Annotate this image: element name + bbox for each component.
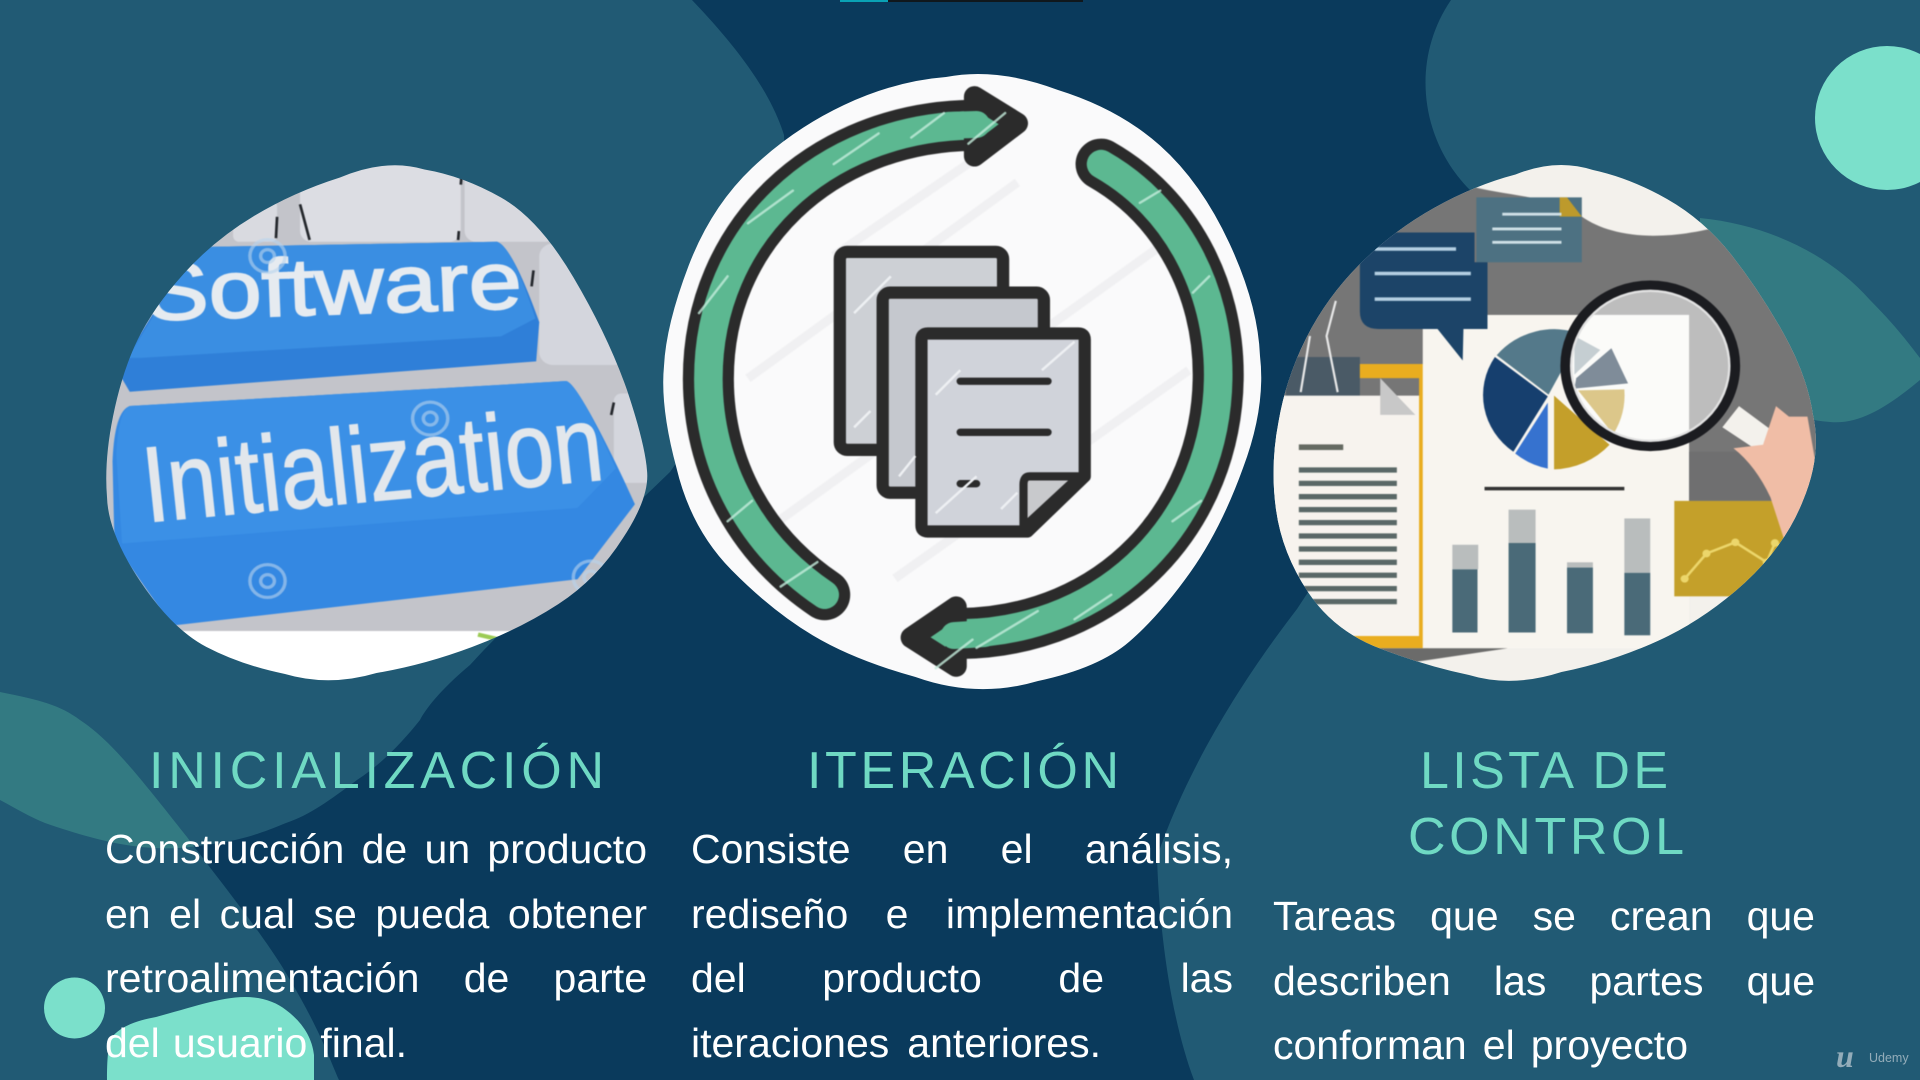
text block: inicialización description: Construcción de un producto [105, 826, 647, 872]
watermark: Udemy: u [1836, 1038, 1854, 1074]
mint circle: top right [1815, 46, 1920, 190]
mint blob: bottom left [107, 997, 314, 1080]
magnifying glass [1563, 285, 1735, 452]
text block: inicialización description: en el cual se pueda obtener [105, 890, 647, 936]
clipboard with text lines [1260, 301, 1428, 648]
hand holding magnifier [1722, 406, 1822, 543]
blue key: Initialization [113, 381, 635, 626]
heading: LISTA DE CONTROL [1408, 742, 1684, 866]
green arrow: bottom right arc [911, 164, 1218, 668]
image: software initialization keyboard [106, 165, 648, 680]
background blob: lower left overlap with top left blob [0, 692, 194, 848]
watermark spirals [250, 240, 609, 597]
blue key: Initialization: Initialization [137, 382, 608, 545]
bar chart [1452, 510, 1650, 635]
background blob: top left [0, 0, 790, 848]
top progress bar [840, 0, 1083, 2]
keyboard keys [233, 161, 660, 483]
text block: iteración description: del producto de las [691, 955, 1233, 1001]
text block: iteración description [691, 826, 1233, 1066]
text block: lista de control description: conforman el proyecto [1273, 1022, 1688, 1068]
background blob: lower left [0, 692, 339, 1080]
image: iteration cycle icon [663, 74, 1262, 690]
heading: LISTA DE CONTROL: LISTA DE [1420, 742, 1668, 800]
text block: inicialización description: del usuario final. [105, 1020, 407, 1066]
grey backdrop [1284, 187, 1816, 460]
watermark: Udemy: Udemy [1869, 1051, 1909, 1065]
text block: lista de control description: describen las partes que [1273, 958, 1815, 1004]
text block: iteración description: rediseño e implementación [691, 890, 1233, 936]
gold line chart card [1674, 501, 1789, 596]
background blob: right side [1157, 0, 1920, 1080]
pie chart [1483, 329, 1610, 469]
text block: lista de control description [1273, 893, 1815, 1068]
stacked documents [840, 252, 1085, 531]
text block: inicialización description [105, 826, 647, 1066]
background blob: translucent right [1700, 218, 1920, 422]
heading: ITERACIÓN: ITERACIÓN [807, 742, 1119, 800]
text block: lista de control description: Tareas que se crean que [1273, 893, 1815, 939]
speech bubbles [1360, 197, 1582, 361]
text block: iteración description: Consiste en el análisis, [691, 826, 1233, 872]
image: analytics report illustration [1274, 165, 1816, 681]
watermark: Udemy [1836, 1038, 1909, 1074]
main report page [1378, 314, 1771, 662]
mint circle: bottom left [44, 978, 105, 1038]
green arrow: top left arc [699, 97, 1017, 595]
text block: inicialización description: retroalimentación de parte [105, 955, 647, 1001]
blue key: Software: Software [143, 235, 523, 338]
faint diagonal streaks [748, 158, 1189, 578]
heading: INICIALIZACIÓN: INICIALIZACIÓN [149, 742, 604, 800]
text block: iteración description: iteraciones anteriores. [691, 1020, 1101, 1066]
heading: LISTA DE CONTROL: CONTROL [1408, 808, 1684, 866]
blue key: Software [121, 235, 539, 392]
